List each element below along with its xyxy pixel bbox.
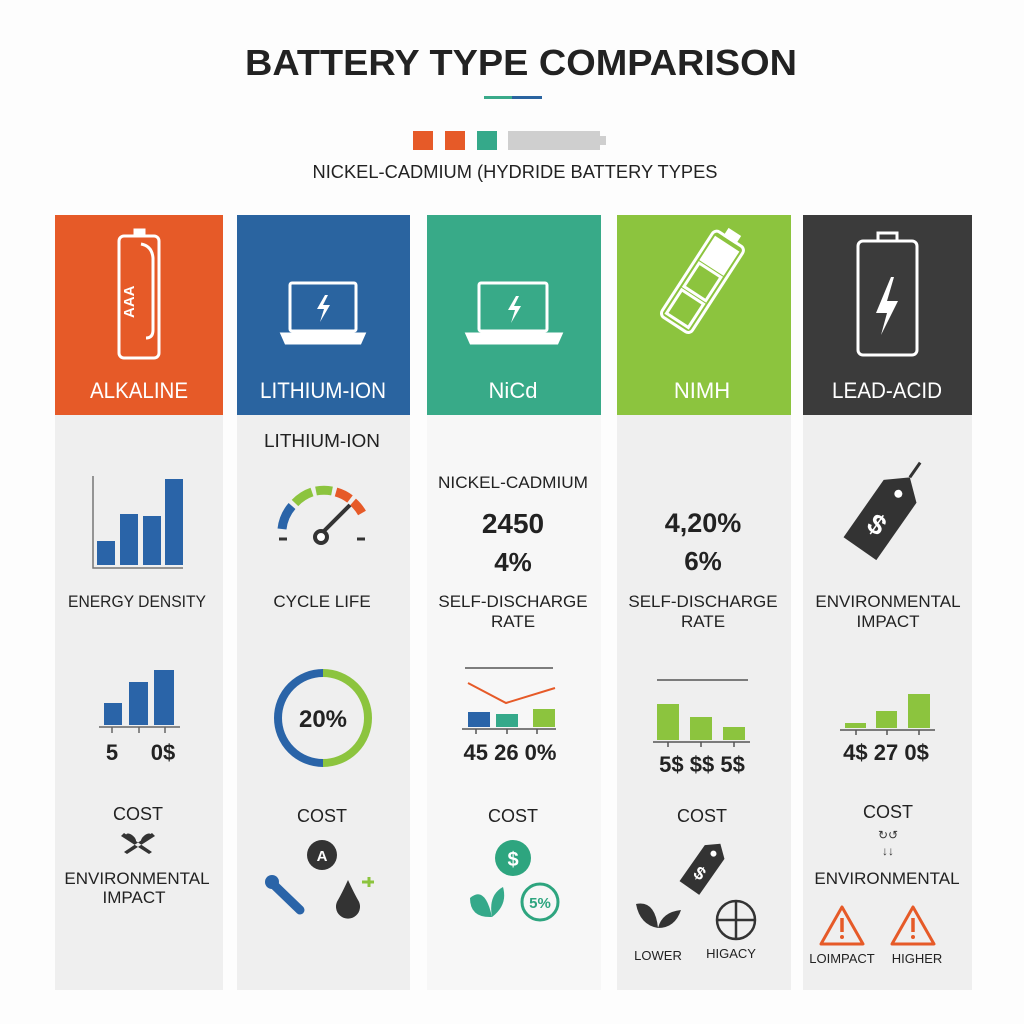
panel: nimh <box>617 215 791 990</box>
panel: lead-acid <box>803 215 972 990</box>
icon: drop <box>336 877 374 919</box>
label environmental: ENVIRONMENTAL <box>814 869 960 888</box>
icon: tilted battery <box>660 223 749 334</box>
icon: 5% circle: 5% <box>529 895 551 912</box>
icon: battery <box>858 233 917 355</box>
label environmental impact <box>815 592 961 631</box>
chart: cost bars: 5 <box>106 740 118 765</box>
stats <box>665 508 741 576</box>
icon: gauge <box>279 490 365 543</box>
header label: NIMH <box>674 378 730 403</box>
label nickel-cadmium: NICKEL-CADMIUM <box>438 473 588 492</box>
chart: donut 20% <box>278 673 368 763</box>
icon: warning triangles <box>821 907 934 944</box>
icon: 5% circle <box>522 884 558 920</box>
label self-discharge <box>628 592 778 631</box>
header label: NiCd <box>489 378 537 403</box>
icon: crossed leaves <box>121 832 155 854</box>
header label: LITHIUM-ION <box>260 378 386 403</box>
icon: A badge <box>307 840 337 870</box>
icon: leaves dark <box>636 904 681 928</box>
icon: arrows: ↓↓ <box>882 844 894 858</box>
icon: big price tag: $ <box>862 507 892 542</box>
stats <box>482 508 544 577</box>
chart: bars <box>840 694 935 765</box>
label cost: COST <box>297 806 347 826</box>
chart: donut 20%: 20% <box>299 706 347 733</box>
chart: line and bars <box>462 668 556 765</box>
subtitle: NICKEL-CADMIUM (HYDRIDE BATTERY TYPES <box>312 162 718 182</box>
label lithium-ion: LITHIUM-ION <box>264 431 380 451</box>
legend swatches <box>413 131 606 150</box>
chart: cost bars <box>99 670 180 765</box>
label environmental impact <box>64 869 210 907</box>
icon: dollar coin: $ <box>507 849 519 871</box>
label cost: COST <box>677 806 727 826</box>
icon: AAA battery <box>119 230 159 358</box>
label cost: COST <box>113 804 163 824</box>
label cycle life: CYCLE LIFE <box>273 592 371 611</box>
title underline <box>484 96 542 99</box>
icon: wrench <box>265 875 300 910</box>
stats: 6% <box>684 546 722 576</box>
icon: AAA battery: AAA <box>121 285 138 318</box>
label self-discharge: SELF-DISCHARGE <box>438 592 588 611</box>
icon: circle chart <box>717 901 755 939</box>
label self-discharge: SELF-DISCHARGE <box>628 592 778 611</box>
label self-discharge: RATE <box>681 612 725 631</box>
stats: 4% <box>494 547 532 577</box>
label environmental impact: IMPACT <box>857 612 919 631</box>
icon: big price tag <box>844 451 937 560</box>
icon: dollar coin <box>495 840 531 876</box>
label cost: COST <box>863 802 913 822</box>
chart: energy density <box>93 476 183 568</box>
labels lower/higacy <box>634 946 756 963</box>
chart: bars <box>653 680 750 777</box>
icon: price tag <box>680 837 730 895</box>
chart: bars: 5$ $$ 5$ <box>659 752 745 777</box>
label cost: COST <box>488 806 538 826</box>
icon: laptop <box>282 283 364 343</box>
icon: price tag: $ <box>690 862 710 884</box>
labels loimpact/higher: LOIMPACT <box>809 951 875 966</box>
chart: bars: 4$ 27 0$ <box>843 740 929 765</box>
labels loimpact/higher <box>809 951 942 966</box>
panel: nicd <box>427 215 601 990</box>
labels loimpact/higher: HIGHER <box>892 951 942 966</box>
title: BATTERY TYPE COMPARISON <box>245 42 797 83</box>
icon: A badge: A <box>317 848 328 865</box>
label environmental impact: ENVIRONMENTAL <box>64 869 210 888</box>
label environmental impact: ENVIRONMENTAL <box>815 592 961 611</box>
labels lower/higacy: LOWER <box>634 948 682 963</box>
icon: leaves <box>470 887 504 917</box>
stats: 4,20% <box>665 508 741 538</box>
header label: LEAD-ACID <box>832 378 942 403</box>
label energy density: ENERGY DENSITY <box>68 592 206 611</box>
chart: cost bars: 0$ <box>151 740 175 765</box>
label environmental impact: IMPACT <box>103 888 165 907</box>
chart: line and bars: 45 26 0% <box>464 740 556 765</box>
icon: arrows: ↻↺ <box>878 828 898 842</box>
icon: laptop <box>467 283 561 343</box>
labels lower/higacy: HIGACY <box>706 946 756 961</box>
icon: arrows <box>878 828 898 858</box>
panel: lithium-ion <box>237 215 410 990</box>
label self-discharge: RATE <box>491 612 535 631</box>
panel: alkaline <box>55 215 223 990</box>
header label: ALKALINE <box>90 378 188 403</box>
stats: 2450 <box>482 508 544 539</box>
label self-discharge <box>438 592 588 631</box>
